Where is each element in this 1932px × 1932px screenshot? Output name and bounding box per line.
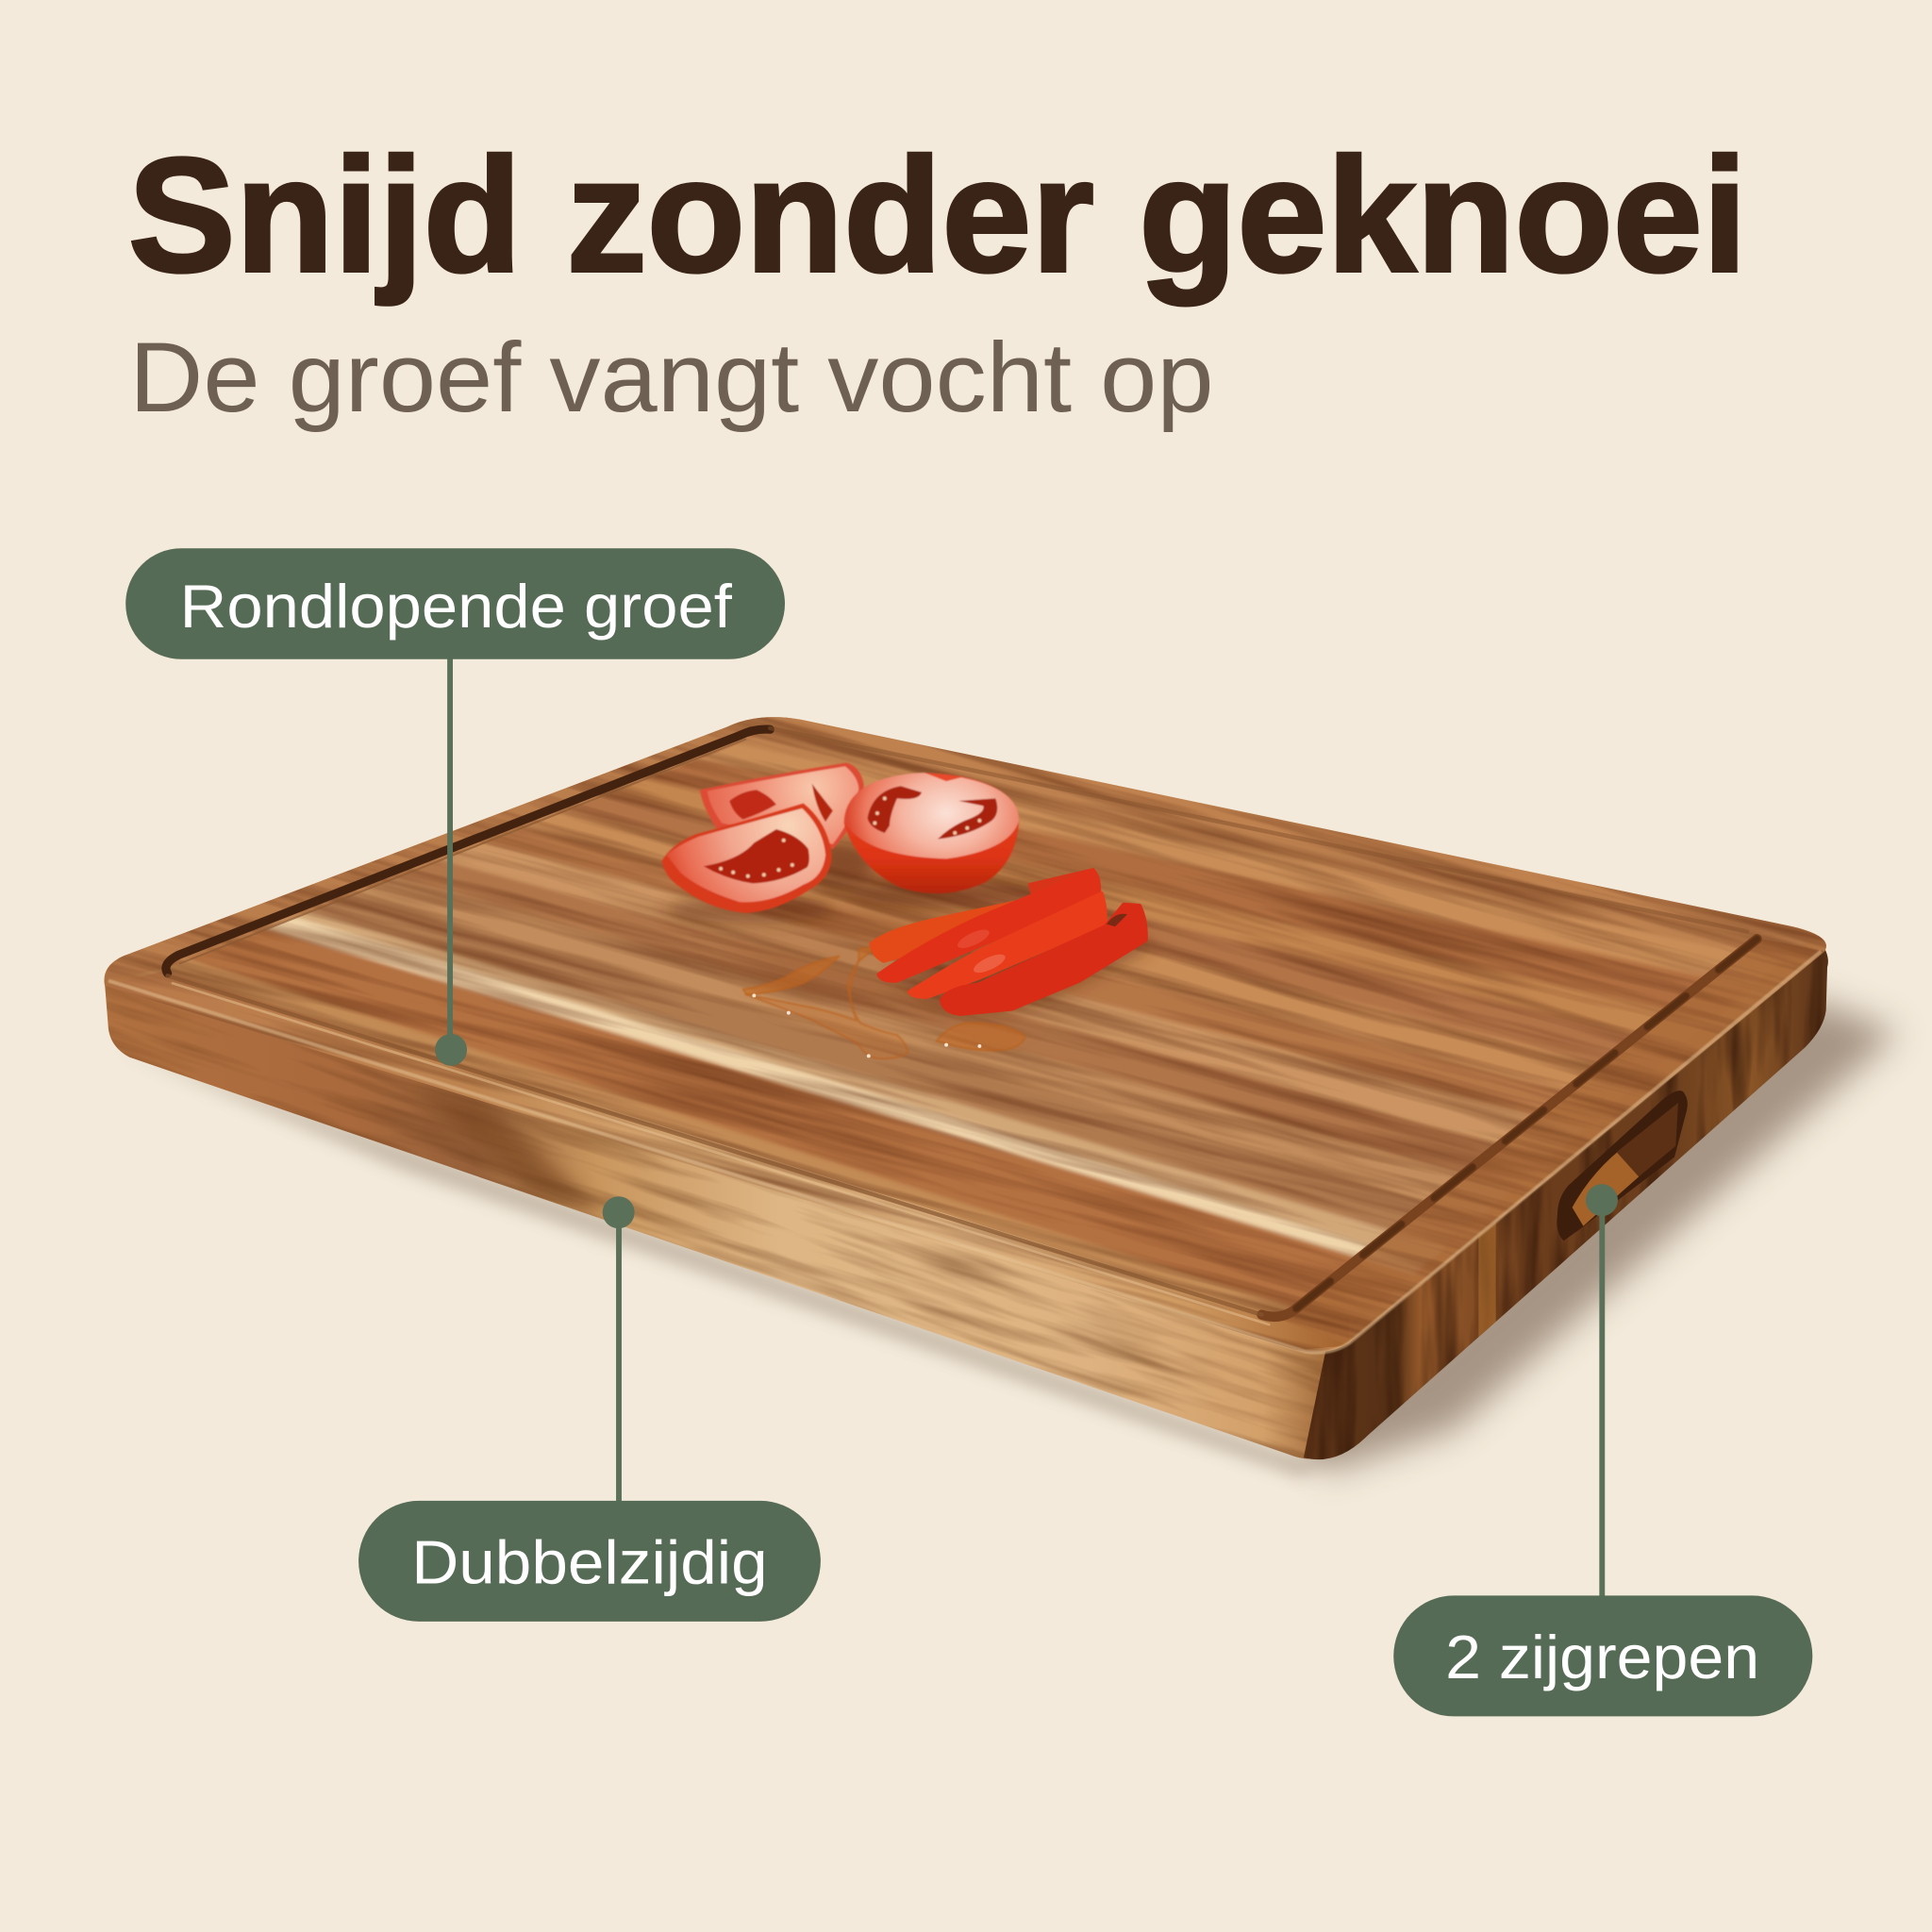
board side face with grip (1304, 950, 1828, 1460)
right rim (1284, 939, 1824, 1345)
callout pill: Rondlopende groef: Rondlopende groef (180, 572, 733, 641)
tomato shadows (668, 838, 1047, 923)
callout pill: 2 zijgrepen (1393, 1595, 1812, 1716)
moisture sheen (740, 901, 1013, 1013)
juice highlights (752, 993, 981, 1058)
title: Snijd zonder geknoei (128, 124, 1747, 306)
back rim (770, 715, 1811, 938)
callout pill: Dubbelzijdig: Dubbelzijdig (411, 1527, 768, 1596)
cutting board photo illustration (104, 717, 1906, 1488)
grip recess (1557, 1091, 1688, 1241)
callout line: Rondlopende groef (435, 653, 467, 1066)
tomato half (844, 773, 1019, 893)
tomato wedge, back (700, 762, 864, 850)
pepper strips (871, 870, 1152, 1014)
back-left rim (105, 712, 801, 979)
callout line: Dubbelzijdig (603, 1196, 635, 1506)
callout pill: 2 zijgrepen: 2 zijgrepen (1445, 1623, 1759, 1691)
callout line: 2 zijgrepen (1586, 1184, 1618, 1601)
subtitle: De groef vangt vocht op (129, 323, 1214, 433)
callout pill: Rondlopende groef (125, 548, 785, 659)
board edge highlight (108, 951, 1821, 1353)
board cast shadow (117, 998, 1897, 1476)
juice spill (743, 946, 1025, 1058)
juice groove (166, 728, 1757, 1324)
board top surface (104, 717, 1826, 1353)
tomato wedge, front (661, 804, 832, 913)
board front face (105, 986, 1325, 1458)
front rim (105, 971, 1349, 1351)
callout pill: Dubbelzijdig (358, 1501, 821, 1622)
